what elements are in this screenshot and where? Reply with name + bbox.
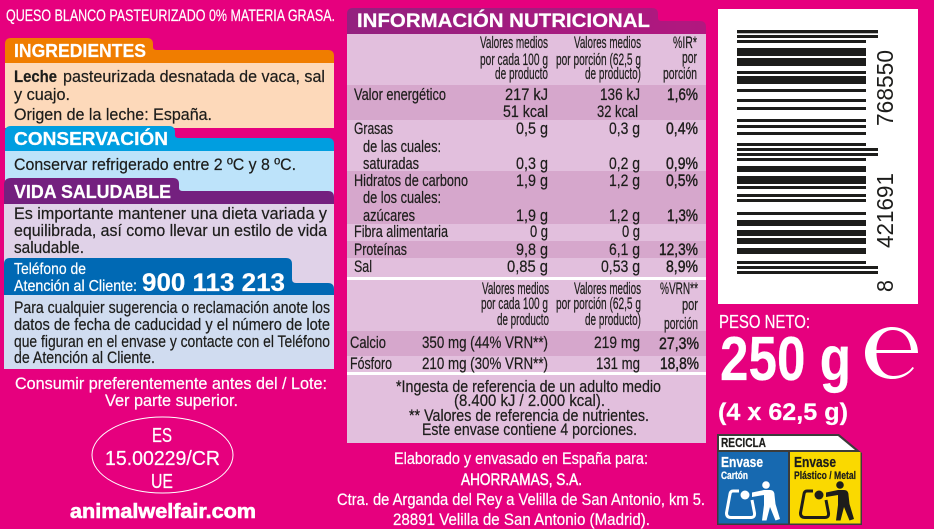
table: nutrition values: 0,4%: [666, 119, 698, 138]
text: footnotes: Este envase contiene 4 porciones.: [422, 421, 637, 439]
table: minerals: de producto: [497, 311, 549, 329]
title: product name: QUESO BLANCO PASTEURIZADO 0% MATERIA GRASA.: [6, 6, 335, 25]
panel: ingredientes: y cuajo.: [14, 85, 70, 104]
table: nutrition values: 1,2 g: [609, 171, 640, 190]
panel: teléfono de atención al cliente: 900 113 213: [142, 269, 285, 297]
panel: vida saludable: VIDA SALUDABLE: [14, 181, 171, 202]
table: nutrition values: 6,1 g: [609, 240, 640, 259]
text: footnotes: (8.400 kJ / 2.000 kcal).: [454, 392, 605, 410]
panel: teléfono de atención al cliente: Atención al Cliente:: [14, 278, 137, 295]
table: nutrition values: de los cuales:: [363, 188, 441, 207]
table: minerals: porción: [664, 315, 698, 333]
panel: blue bin: [718, 452, 788, 524]
table: nutrition values: 32 kcal: [597, 102, 638, 121]
table: nutrition values: por cada 100 g: [480, 51, 548, 69]
table: minerals: Valores medios: [482, 280, 549, 298]
text: footnotes: [396, 378, 661, 439]
table: nutrition values: 0,3 g: [609, 119, 640, 138]
table: minerals: 210 mg (30% VRN**): [422, 354, 548, 373]
table: nutrition values: [354, 34, 698, 276]
table: nutrition values: 1,9 g: [516, 171, 548, 190]
barcode digits: 8: [872, 280, 898, 292]
table: nutrition values: de producto): [585, 65, 641, 83]
text: manufacturer address: Ctra. de Arganda del Rey a Velilla de San Antonio, km 5.: [337, 490, 705, 509]
table: nutrition values: 12,3%: [659, 240, 698, 259]
panel: ingredientes: Leche: [14, 67, 57, 86]
table: nutrition values: 1,2 g: [609, 206, 640, 225]
table: nutrition values: 1,9 g: [516, 206, 548, 225]
panel: información nutricional: [347, 8, 706, 443]
table: nutrition values: 1,6%: [667, 85, 698, 104]
text: manufacturer address: Elaborado y envasado en España para:: [394, 449, 648, 468]
table: minerals: Calcio: [350, 333, 386, 352]
icon: health mark oval: 15.00229/CR: [105, 448, 220, 470]
net weight: (4 x 62,5 g): [718, 399, 848, 426]
table: nutrition values: 1,3%: [667, 206, 698, 225]
net weight: 250 g: [720, 325, 851, 394]
text: consumo preferente: [15, 374, 327, 410]
table: nutrition values: Grasas: [354, 119, 393, 138]
table: nutrition values: 0 g: [622, 222, 640, 241]
panel: ingredientes: [5, 38, 334, 128]
table: minerals: %VRN**: [660, 280, 698, 298]
panel: ingredientes: Origen de la leche: España.: [14, 105, 212, 124]
panel: ingredientes: INGREDIENTES: [14, 40, 146, 61]
icon: estimated sign e: [865, 327, 918, 379]
text: manufacturer address: [337, 449, 705, 529]
table: nutrition values: 0,5 g: [516, 119, 548, 138]
table: nutrition values: 136 kJ: [600, 85, 640, 104]
text: consumo preferente: Ver parte superior.: [105, 391, 238, 410]
icon: health mark oval: UE: [151, 471, 173, 493]
panel: vida saludable: Es importante mantener una dieta variada y: [14, 204, 327, 223]
barcode digits: 421691: [872, 173, 898, 248]
panel: teléfono de atención al cliente: que figuran en el envase y contacte con el Teléfono: [14, 332, 330, 351]
panel: teléfono de atención al cliente: de Atención al Cliente.: [14, 348, 155, 367]
panel: yellow bin: Plástico / Metal: [794, 470, 856, 482]
barcode digits: 768550: [872, 50, 898, 126]
table: minerals: por porción (62,5 g: [556, 295, 641, 313]
table: minerals: [350, 280, 699, 373]
table: nutrition values: 9,8 g: [516, 240, 548, 259]
panel: ingredientes: pasteurizada desnatada de vaca, sal: [63, 67, 325, 86]
table: minerals: por cada 100 g: [481, 295, 548, 313]
table: nutrition values: 0,5%: [666, 171, 698, 190]
panel: yellow bin: [790, 452, 860, 524]
panel: conservación: CONSERVACIÓN: [14, 128, 168, 149]
panel: blue bin: Cartón: [721, 470, 748, 482]
table: nutrition values: Valor energético: [354, 85, 446, 104]
table: nutrition values: Hidratos de carbono: [354, 171, 468, 190]
table: minerals: 219 mg: [594, 333, 640, 352]
panel: teléfono de atención al cliente: Para cualquier sugerencia o reclamación anote los: [14, 298, 330, 317]
net weight: PESO NETO:: [719, 311, 810, 332]
panel: vida saludable: [4, 178, 334, 291]
table: minerals: Valores medios: [574, 280, 641, 298]
table: nutrition values: Fibra alimentaria: [354, 222, 448, 241]
icon: health mark oval: [92, 417, 233, 493]
table: nutrition values: Proteínas: [354, 240, 407, 259]
table: minerals: 18,8%: [660, 354, 699, 373]
table: nutrition values: 217 kJ: [505, 85, 548, 104]
panel: teléfono de atención al cliente: datos de fecha de caducidad y el número de lote: [14, 315, 330, 334]
text: manufacturer address: AHORRAMAS, S.A.: [461, 470, 582, 489]
table: minerals: 27,3%: [659, 334, 699, 353]
panel: conservación: [5, 126, 334, 206]
panel: vida saludable: equilibrada, así como llevar un estilo de vida: [14, 221, 328, 240]
table: minerals: Fósforo: [350, 354, 392, 373]
panel: blue bin: Envase: [721, 455, 763, 471]
table: minerals: 350 mg (44% VRN**): [422, 333, 548, 352]
table: nutrition values: 0 g: [530, 222, 548, 241]
table: nutrition values: Valores medios: [574, 34, 641, 52]
panel: teléfono de atención al cliente: [4, 258, 334, 369]
panel: teléfono de atención al cliente: Teléfono de: [14, 261, 86, 278]
table: nutrition values: por: [682, 49, 697, 67]
recycling heading: RECICLA: [721, 435, 766, 450]
table: nutrition values: 51 kcal: [503, 102, 548, 121]
text: consumo preferente: Consumir preferentemente antes del / Lote:: [15, 374, 327, 393]
recycling label: [717, 434, 862, 525]
table: nutrition values: 0,3 g: [516, 154, 548, 173]
table: nutrition values: 8,9%: [666, 257, 698, 276]
panel: vida saludable: saludable.: [14, 238, 84, 257]
table: nutrition values: 0,85 g: [507, 257, 548, 276]
barcode digits: [872, 50, 898, 292]
table: nutrition values: porción: [663, 65, 697, 83]
text: website: animalwelfair.com: [70, 501, 256, 523]
table: minerals: de producto): [585, 311, 641, 329]
table: nutrition values: de las cuales:: [363, 137, 441, 156]
icon: health mark oval: ES: [152, 425, 172, 447]
table: nutrition values: 0,53 g: [601, 257, 640, 276]
table: nutrition values: 0,2 g: [609, 154, 640, 173]
table: nutrition values: %IR*: [673, 34, 697, 52]
heading: información nutricional: INFORMACIÓN NUTRICIONAL: [357, 8, 650, 32]
panel: conservación: Conservar refrigerado entre 2 ºC y 8 ºC.: [14, 155, 296, 174]
table: nutrition values: Sal: [354, 257, 372, 276]
table: nutrition values: Valores medios: [480, 34, 548, 52]
table: nutrition values: azúcares: [363, 206, 415, 225]
net weight: [718, 311, 851, 426]
table: minerals: 131 mg: [596, 354, 640, 373]
table: nutrition values: saturadas: [363, 154, 419, 173]
table: nutrition values: de producto: [495, 65, 548, 83]
table: minerals: por: [682, 296, 698, 314]
table: nutrition values: por porción (62,5 g: [556, 51, 641, 69]
barcode: [718, 9, 918, 304]
panel: yellow bin: Envase: [794, 455, 836, 471]
text: footnotes: *Ingesta de referencia de un adulto medio: [396, 378, 661, 396]
table: nutrition values: 0,9%: [666, 154, 698, 173]
text: manufacturer address: 28891 Velilla de San Antonio (Madrid).: [393, 510, 650, 529]
text: footnotes: ** Valores de referencia de nutrientes.: [409, 407, 649, 425]
